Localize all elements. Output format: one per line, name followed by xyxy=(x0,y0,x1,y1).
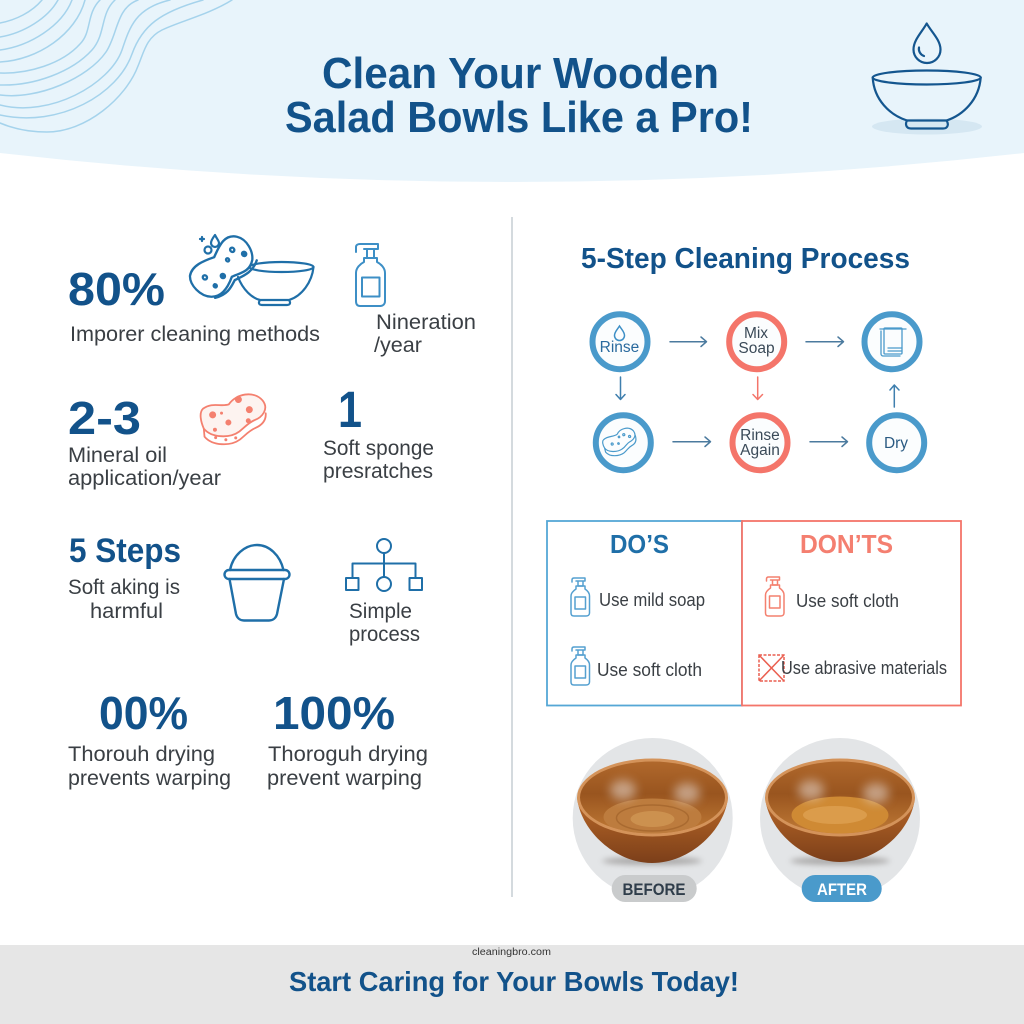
label: after xyxy=(802,875,882,902)
panel: don'ts: DON’TS xyxy=(800,529,893,559)
step: rinse: Rinse xyxy=(600,339,639,356)
stat: 80% xyxy=(68,263,320,346)
stat: simple process: Simple xyxy=(349,600,412,623)
stat: simple process: process xyxy=(349,623,420,646)
header band xyxy=(0,0,1024,182)
step: rinse again xyxy=(732,415,788,470)
panel: don'ts xyxy=(742,521,961,706)
source credit: cleaningbro.com xyxy=(472,947,551,958)
step: sponge xyxy=(596,415,651,470)
stat: 1: presratches xyxy=(323,460,433,483)
stat: 00%: 00% xyxy=(99,687,188,739)
panel: don'ts: Use soft cloth xyxy=(796,591,899,611)
icon: bottle xyxy=(766,577,784,616)
stat: 00%: prevents warping xyxy=(68,767,231,790)
stat: 2-3: 2-3 xyxy=(68,392,141,444)
icon: red sponge xyxy=(199,393,268,446)
call to action: Start Caring for Your Bowls Today! xyxy=(289,966,739,997)
icon: bottle xyxy=(571,578,590,616)
step: mix soap: Mix xyxy=(744,325,768,342)
panel: do's: Use mild soap xyxy=(599,590,705,610)
icon: process tree xyxy=(346,539,422,591)
footer banner xyxy=(0,945,1024,1024)
step: mix soap xyxy=(729,314,784,369)
label: before xyxy=(612,875,697,902)
label: after: AFTER xyxy=(817,880,867,899)
step: rinse again: Rinse xyxy=(740,427,780,444)
title: Clean Your Wooden xyxy=(322,49,719,98)
stat: 5 steps: Soft aking is xyxy=(68,576,180,599)
icon: crossed-out abrasive pad xyxy=(759,655,784,681)
icon: bottle xyxy=(571,647,590,685)
arrows between steps xyxy=(616,337,899,446)
stat: 100%: prevent warping xyxy=(267,767,422,790)
step: dry xyxy=(869,415,924,470)
panel: key stats xyxy=(68,230,476,790)
stat: mineration per year: /year xyxy=(374,334,422,357)
step: rinse again: Again xyxy=(740,442,780,459)
icon: bucket xyxy=(224,545,290,620)
stat: 1: 1 xyxy=(338,381,362,438)
panel: do's xyxy=(547,521,742,706)
stat: mineration per year: Nineration xyxy=(376,311,476,334)
stat: 2-3 xyxy=(68,392,221,490)
title: Salad Bowls Like a Pro! xyxy=(285,93,753,142)
stat: simple process xyxy=(349,600,420,646)
icon: sponge and bowl xyxy=(184,230,314,306)
stat: 1: Soft sponge xyxy=(323,437,434,460)
stat: 100%: 100% xyxy=(273,687,395,739)
stat: 80%: 80% xyxy=(68,263,165,315)
before bowl photo xyxy=(573,738,733,898)
icon: bowl with water drop xyxy=(872,24,982,134)
step: mix soap: Soap xyxy=(738,340,775,357)
step: dry: Dry xyxy=(884,435,908,452)
panel: don'ts: Use abrasive materials xyxy=(781,658,947,678)
stat: 2-3: Mineral oil xyxy=(68,444,167,467)
stat: 5 steps xyxy=(68,532,181,623)
stat: 5 steps: harmful xyxy=(90,600,163,623)
after bowl photo xyxy=(760,738,920,898)
step: rinse xyxy=(592,314,648,369)
flow chart: cleaning steps xyxy=(592,314,924,470)
stat: 5 steps: 5 Steps xyxy=(69,532,181,570)
heading: 5-step cleaning process: 5-Step Cleaning Process xyxy=(581,243,910,275)
stat: mineration per year xyxy=(374,311,476,357)
panel: do's: DO’S xyxy=(610,529,669,559)
stat: 100%: Thoroguh drying xyxy=(268,743,428,766)
decorative wave lines xyxy=(0,0,232,132)
stat: 100% xyxy=(267,687,428,790)
stat: 00%: Thorouh drying xyxy=(68,743,215,766)
title xyxy=(285,49,753,142)
icon: soap dispenser xyxy=(356,244,385,306)
stat: 80%: Imporer cleaning methods xyxy=(70,323,320,346)
step: towel xyxy=(864,314,920,369)
label: before: BEFORE xyxy=(622,880,686,899)
panel: do's: Use soft cloth xyxy=(597,660,702,680)
stat: 00% xyxy=(68,687,231,790)
stat: 1 xyxy=(323,381,434,483)
stat: 2-3: application/year xyxy=(68,467,221,490)
panel: do's and don'ts xyxy=(547,521,961,706)
